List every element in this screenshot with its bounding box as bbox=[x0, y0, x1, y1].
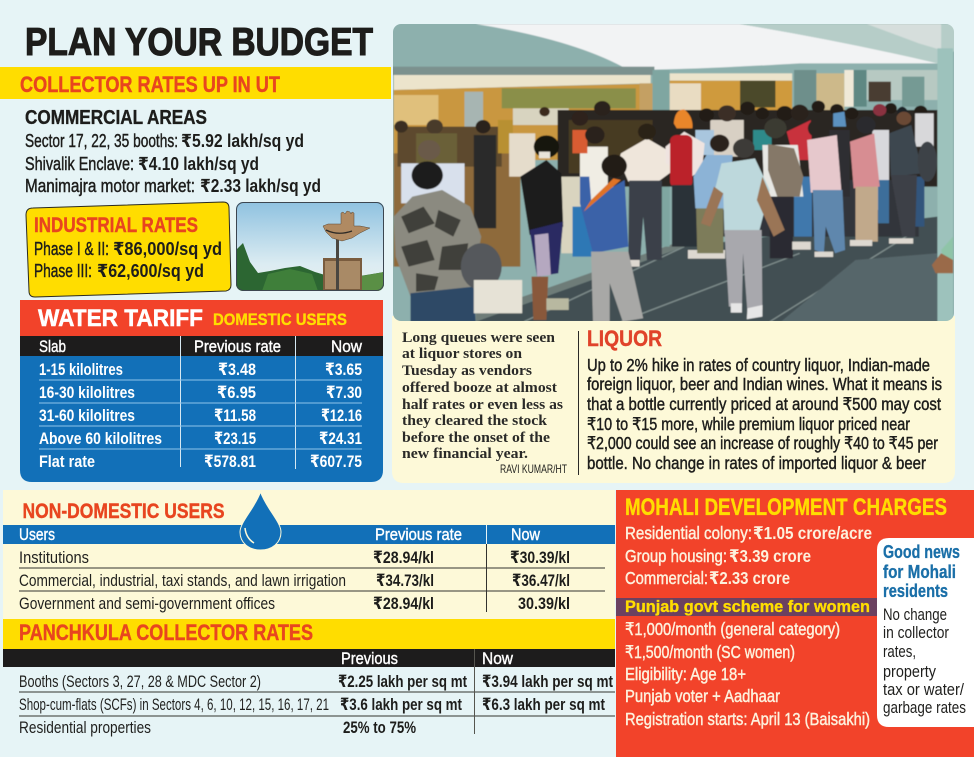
text block: punjab scheme details: Punjab voter + Aadhaar bbox=[625, 686, 780, 706]
panel: non-domestic users bbox=[3, 490, 615, 620]
table header: Previous rate bbox=[375, 525, 462, 544]
panel: panchkula collector rates bbox=[3, 619, 615, 737]
table rows: ₹6.95 bbox=[217, 383, 256, 402]
table rows: ₹23.15 bbox=[214, 429, 256, 448]
image: open hand monument bbox=[236, 202, 384, 291]
table header bbox=[19, 525, 541, 544]
text block: commercial areas: ₹5.92 lakh/sq yd bbox=[181, 131, 304, 151]
table header: Now bbox=[482, 649, 514, 668]
callout: good news: tax or water/ bbox=[883, 680, 964, 699]
table rows: ₹34.73/kl bbox=[376, 571, 434, 590]
table rows: ₹3.6 lakh per sq mt bbox=[340, 695, 462, 714]
table rows: ₹28.94/kl bbox=[373, 548, 434, 567]
text block: development charges: Residential colony: bbox=[625, 523, 752, 543]
text block: commercial areas: ₹2.33 lakh/sq yd bbox=[200, 176, 321, 196]
title: PLAN YOUR BUDGET bbox=[25, 21, 373, 64]
table header: Now bbox=[511, 525, 541, 544]
table rows: Flat rate bbox=[39, 452, 95, 471]
text block: punjab scheme details: ₹1,500/month (SC women) bbox=[625, 642, 795, 662]
heading: domestic users: DOMESTIC USERS bbox=[213, 310, 347, 329]
panel: industrial rates bbox=[26, 202, 231, 297]
table rows: Government and semi-government offices bbox=[19, 594, 275, 613]
heading: non-domestic users: NON-DOMESTIC USERS bbox=[22, 500, 224, 523]
table rows: ₹6.3 lakh per sq mt bbox=[482, 695, 605, 714]
table rows: ₹578.81 bbox=[204, 452, 256, 471]
panel: water tariff domestic users bbox=[20, 300, 383, 482]
table rows: Residential properties bbox=[19, 718, 151, 737]
table rows: 1-15 kilolitres bbox=[39, 360, 123, 379]
text block: punjab scheme details bbox=[625, 619, 870, 729]
table rows: Institutions bbox=[19, 548, 89, 567]
table rows: ₹28.94/kl bbox=[373, 594, 434, 613]
callout: good news: in collector bbox=[883, 623, 949, 642]
text block: liquor: ₹10 to ₹15 more, while premium liquor priced near bbox=[587, 414, 910, 434]
text block: photo caption: they cleared the stock bbox=[402, 413, 548, 429]
table rows: Commercial, industrial, taxi stands, and lawn irrigation bbox=[19, 571, 346, 590]
text block: photo caption bbox=[402, 330, 567, 476]
text block: development charges: Group housing: bbox=[625, 546, 727, 566]
text block: photo caption: half rates or even less as bbox=[402, 397, 563, 413]
text block: photo caption: at liquor stores on bbox=[402, 346, 523, 362]
text block: punjab scheme details: Registration starts: April 13 (Baisakhi) bbox=[625, 709, 870, 729]
table rows bbox=[39, 360, 362, 471]
panel: mohali development charges bbox=[616, 490, 974, 757]
text block: development charges: ₹3.39 crore bbox=[729, 546, 811, 566]
text block: commercial areas bbox=[25, 107, 321, 196]
text block: development charges: ₹2.33 crore bbox=[709, 568, 790, 588]
text block: photo caption: Tuesday as vendors bbox=[402, 363, 532, 379]
table header bbox=[341, 649, 514, 668]
table rows: ₹30.39/kl bbox=[510, 548, 570, 567]
text block: development charges: Commercial: bbox=[625, 568, 708, 588]
table rows: 16-30 kilolitres bbox=[39, 383, 135, 402]
text block: development charges: ₹1.05 crore/acre bbox=[753, 523, 872, 543]
text block: photo caption: before the onset of the bbox=[402, 430, 550, 446]
text block: commercial areas: COMMERCIAL AREAS bbox=[25, 107, 207, 129]
table header: Now bbox=[331, 337, 363, 356]
text block: development charges bbox=[625, 523, 872, 588]
table header bbox=[39, 337, 363, 356]
text block: punjab scheme details: ₹1,000/month (general category) bbox=[625, 619, 840, 639]
people bbox=[787, 120, 813, 160]
table rows: 25% to 75% bbox=[343, 718, 416, 737]
text block: photo caption: Long queues were seen bbox=[402, 330, 556, 346]
table rows: 31-60 kilolitres bbox=[39, 406, 135, 425]
callout: good news: property bbox=[883, 662, 936, 681]
text block: liquor bbox=[587, 326, 942, 473]
heading: panchkula collector rates: PANCHKULA COLLECTOR RATES bbox=[19, 620, 313, 645]
photo: queue at liquor store bbox=[390, 20, 974, 325]
text block: liquor: LIQUOR bbox=[587, 326, 662, 351]
text block: photo caption: RAVI KUMAR/HT bbox=[500, 462, 567, 476]
table rows: ₹11.58 bbox=[214, 406, 256, 425]
text block: photo caption: offered booze at almost bbox=[402, 380, 557, 396]
table rows: ₹24.31 bbox=[319, 429, 362, 448]
text block: commercial areas: Shivalik Enclave: bbox=[25, 154, 134, 174]
text block: punjab scheme details: Eligibility: Age 18+ bbox=[625, 664, 746, 684]
table rows: Booths (Sectors 3, 27, 28 & MDC Sector 2) bbox=[19, 672, 261, 691]
background crowd inside store bbox=[394, 101, 610, 228]
panel: industrial rates: ₹86,000/sq yd bbox=[113, 239, 222, 259]
table rows: ₹607.75 bbox=[310, 452, 362, 471]
callout: good news: rates, bbox=[883, 642, 916, 661]
table rows: ₹3.65 bbox=[325, 360, 362, 379]
panel: collector rates heading: COLLECTOR RATES UP IN UT bbox=[20, 72, 280, 97]
table header: Previous rate bbox=[194, 337, 281, 356]
callout: good news bbox=[877, 538, 974, 727]
table rows bbox=[19, 672, 613, 737]
panel: industrial rates: Phase III: bbox=[34, 261, 92, 281]
callout: good news: No change bbox=[883, 605, 947, 624]
table rows: ₹2.25 lakh per sq mt bbox=[338, 672, 467, 691]
table rows: ₹3.94 lakh per sq mt bbox=[482, 672, 613, 691]
table rows: ₹3.48 bbox=[218, 360, 256, 379]
callout: good news: residents bbox=[883, 581, 948, 601]
text block: commercial areas: Sector 17, 22, 35 booths: bbox=[25, 131, 178, 151]
text block: liquor: bottle. No change in rates of imported liquor & beer bbox=[587, 453, 926, 473]
heading: water tariff: WATER TARIFF bbox=[38, 305, 203, 332]
table header: Previous bbox=[341, 649, 398, 668]
icon: water drop bbox=[240, 492, 281, 550]
panel: liquor caption background bbox=[392, 316, 955, 483]
table rows: ₹7.30 bbox=[326, 383, 362, 402]
callout: good news: for Mohali bbox=[883, 562, 956, 582]
panel: collector rates heading bbox=[0, 67, 391, 99]
table rows: Shop-cum-flats (SCFs) in Sectors 4, 6, 10, 12, 15, 16, 17, 21 bbox=[19, 695, 329, 714]
panel: industrial rates: Phase I & II: bbox=[34, 239, 109, 259]
panel: industrial rates: INDUSTRIAL RATES bbox=[34, 214, 198, 237]
heading: punjab scheme: Punjab govt scheme for women bbox=[625, 597, 870, 616]
table header: Slab bbox=[39, 337, 66, 356]
text block: commercial areas: ₹4.10 lakh/sq yd bbox=[138, 154, 259, 174]
table rows bbox=[19, 548, 570, 613]
text block: photo caption: new financial year. bbox=[402, 446, 528, 462]
table rows: Above 60 kilolitres bbox=[39, 429, 162, 448]
table rows: ₹36.47/kl bbox=[512, 571, 570, 590]
table rows: ₹12.16 bbox=[321, 406, 362, 425]
panel: industrial rates: ₹62,600/sq yd bbox=[97, 261, 204, 281]
text block: commercial areas: Manimajra motor market: bbox=[25, 176, 195, 196]
table header: Users bbox=[19, 525, 55, 544]
table rows: 30.39/kl bbox=[518, 594, 570, 613]
